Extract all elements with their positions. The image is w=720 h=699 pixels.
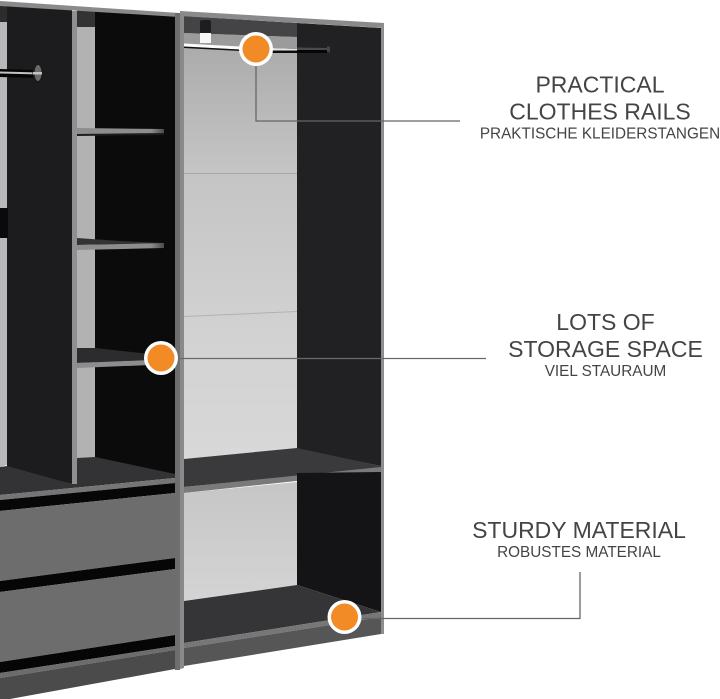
label: lots of storage space [508, 309, 703, 380]
shelf 1 [77, 128, 164, 136]
marker: storage space [144, 341, 178, 375]
top edge [180, 11, 384, 28]
front shelf edge [0, 478, 175, 500]
back panel centre [77, 26, 95, 458]
black bracket [0, 208, 8, 238]
label: practical clothes rails: CLOTHES RAILS [509, 98, 691, 124]
plinth [184, 617, 381, 666]
label: lots of storage space: LOTS OF [556, 309, 655, 335]
shelf 3 [77, 348, 150, 368]
right frame [381, 24, 384, 634]
label: sturdy material: STURDY MATERIAL [472, 517, 686, 543]
back panel upper [184, 44, 297, 459]
drawer 1 [0, 493, 175, 581]
left wardrobe section [0, 1, 180, 699]
marker: clothes rails [239, 32, 273, 66]
label: practical clothes rails: PRACTICAL [535, 72, 665, 98]
right frame [175, 13, 180, 670]
light fixture [200, 20, 211, 43]
dark side panel [7, 5, 72, 484]
dark right side panel [297, 23, 381, 466]
leader line: storage space [176, 358, 486, 360]
black gap behind drawers [0, 483, 175, 511]
label: practical clothes rails: PRAKTISCHE KLEIDERSTANGEN [480, 126, 720, 142]
bottom shelf surface [184, 585, 381, 643]
shelf 2 [77, 238, 164, 250]
label: lots of storage space: STORAGE SPACE [508, 336, 703, 362]
drawer 2 [0, 569, 175, 662]
top dark strip [184, 16, 297, 37]
centre partition [72, 11, 77, 484]
dark right panel [95, 11, 175, 476]
clothes rail left [0, 63, 44, 83]
leader line: sturdy material [360, 572, 580, 618]
left frame [180, 11, 184, 669]
middle shelf front edge [184, 467, 381, 493]
label: sturdy material [472, 517, 686, 561]
marker: sturdy material [328, 600, 362, 634]
label: sturdy material: ROBUSTES MATERIAL [497, 544, 661, 561]
bottom shelf front edge [184, 612, 381, 648]
leader line: clothes rails [256, 60, 460, 121]
clothes rail right [184, 44, 330, 53]
top grey strip [184, 33, 297, 50]
back panel far left [0, 22, 7, 467]
plinth [0, 646, 175, 678]
label: practical clothes rails [480, 72, 720, 142]
lower back panel [184, 482, 297, 601]
lower dark side panel [297, 472, 381, 612]
top edge [0, 1, 179, 17]
floor of compartment [0, 457, 175, 495]
middle shelf surface [184, 448, 381, 487]
right wardrobe section [180, 11, 384, 669]
label: lots of storage space: VIEL STAURAUM [545, 363, 666, 380]
